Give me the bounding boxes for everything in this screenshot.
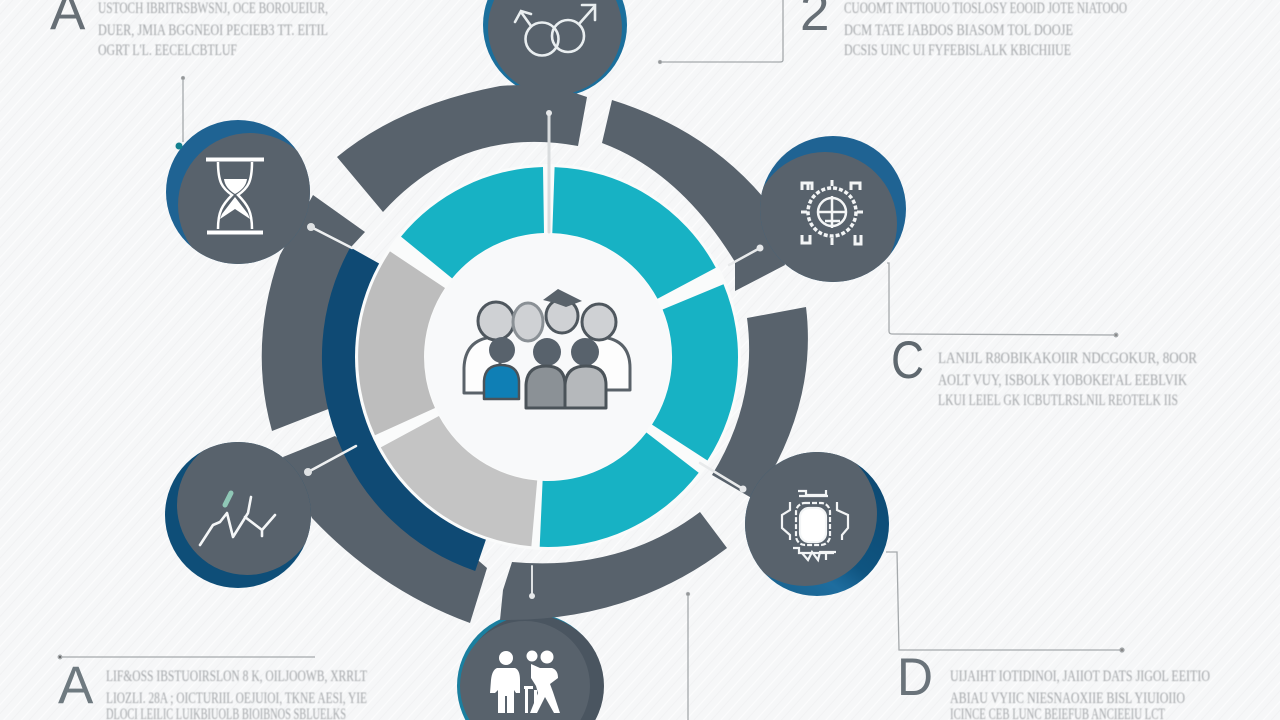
icon: hourglass	[206, 160, 264, 232]
icon: family figures	[490, 650, 560, 713]
front bodies	[484, 365, 519, 399]
node: hourglass	[166, 120, 310, 264]
icon: group of people	[464, 289, 630, 408]
text block: bottom right D: ABIAU VYIIC NIESNAOXIIE BISL YIUIOIIO	[950, 690, 1185, 707]
segment: teal bottom	[540, 432, 699, 547]
navy arc	[322, 247, 486, 571]
text block: bottom left A	[58, 656, 367, 720]
text block: bottom right D	[897, 648, 1210, 720]
graduation cap	[543, 289, 582, 307]
text block: bottom left A: LIOZLI. 28A ; OICTURIIL OEJUIOI, TKNE AESI, YIE	[106, 690, 367, 707]
text block: top left A	[50, 0, 328, 59]
icon: gender rings	[515, 5, 595, 56]
text block: bottom right D: D	[897, 648, 933, 707]
text block: top right 2: DCM TATE IABDOS BIASOM TOL DOOJE	[844, 22, 1073, 39]
text block: bottom left A: LIF&OSS IBSTUOIRSLON 8 K, OILJOOWB, XRRLT	[106, 668, 367, 685]
node: line chart	[165, 435, 317, 588]
segment: grey bottom	[381, 416, 537, 546]
icon: line chart	[200, 493, 275, 545]
text block: right C: LANIJL R8OBIKAKOIIR NDCGOKUR, 8OOR	[938, 350, 1197, 367]
icon: virus emblem	[801, 180, 863, 245]
outer ring segments	[262, 85, 808, 623]
text block: top right 2	[800, 0, 1127, 59]
text block: top right 2: DCSIS UINC UI FYFEBISLALK KBICHIIUE	[844, 42, 1071, 59]
text block: right C: LKUI LEIEL GK ICBUTLRSLNIL REOTELK IIS	[938, 392, 1178, 409]
text block: top left A: DUER, JMIA BGGNEOI PECIEB3 TT. EITIL	[98, 22, 328, 39]
node: virus emblem	[760, 136, 906, 282]
segment: grey left	[358, 251, 445, 435]
text block: top left A: USTOCH IBRITRSBWSNJ, OCE BOROUEIUR,	[98, 0, 328, 17]
node: people	[457, 613, 604, 720]
segment: teal top right	[552, 167, 716, 299]
segment: teal top left	[401, 167, 544, 278]
front heads	[489, 337, 599, 366]
back row heads	[478, 299, 616, 341]
text block: right C	[891, 331, 1197, 409]
text block: top right 2: CUOOMT INTTIOUO TIOSLOSY EOOID JOTE NIATOOO	[844, 0, 1127, 17]
leader lines with dots	[304, 110, 764, 599]
segment: teal right	[652, 284, 738, 460]
donut chart	[358, 167, 738, 547]
white ring base	[355, 164, 741, 550]
centre disc	[425, 234, 671, 480]
back row bodies	[464, 337, 630, 393]
text block: right C: AOLT VUY, ISBOLK YIOBOKEI'AL EEBLVIK	[938, 372, 1187, 389]
node: gender symbols	[483, 0, 627, 97]
text block: top left A: OGRT L'L. EECELCBTLUF	[98, 42, 237, 59]
text block: right C: C	[891, 331, 924, 390]
node: chip	[745, 452, 889, 596]
icon: chip	[782, 490, 848, 560]
text block: bottom left A: A	[58, 656, 94, 715]
